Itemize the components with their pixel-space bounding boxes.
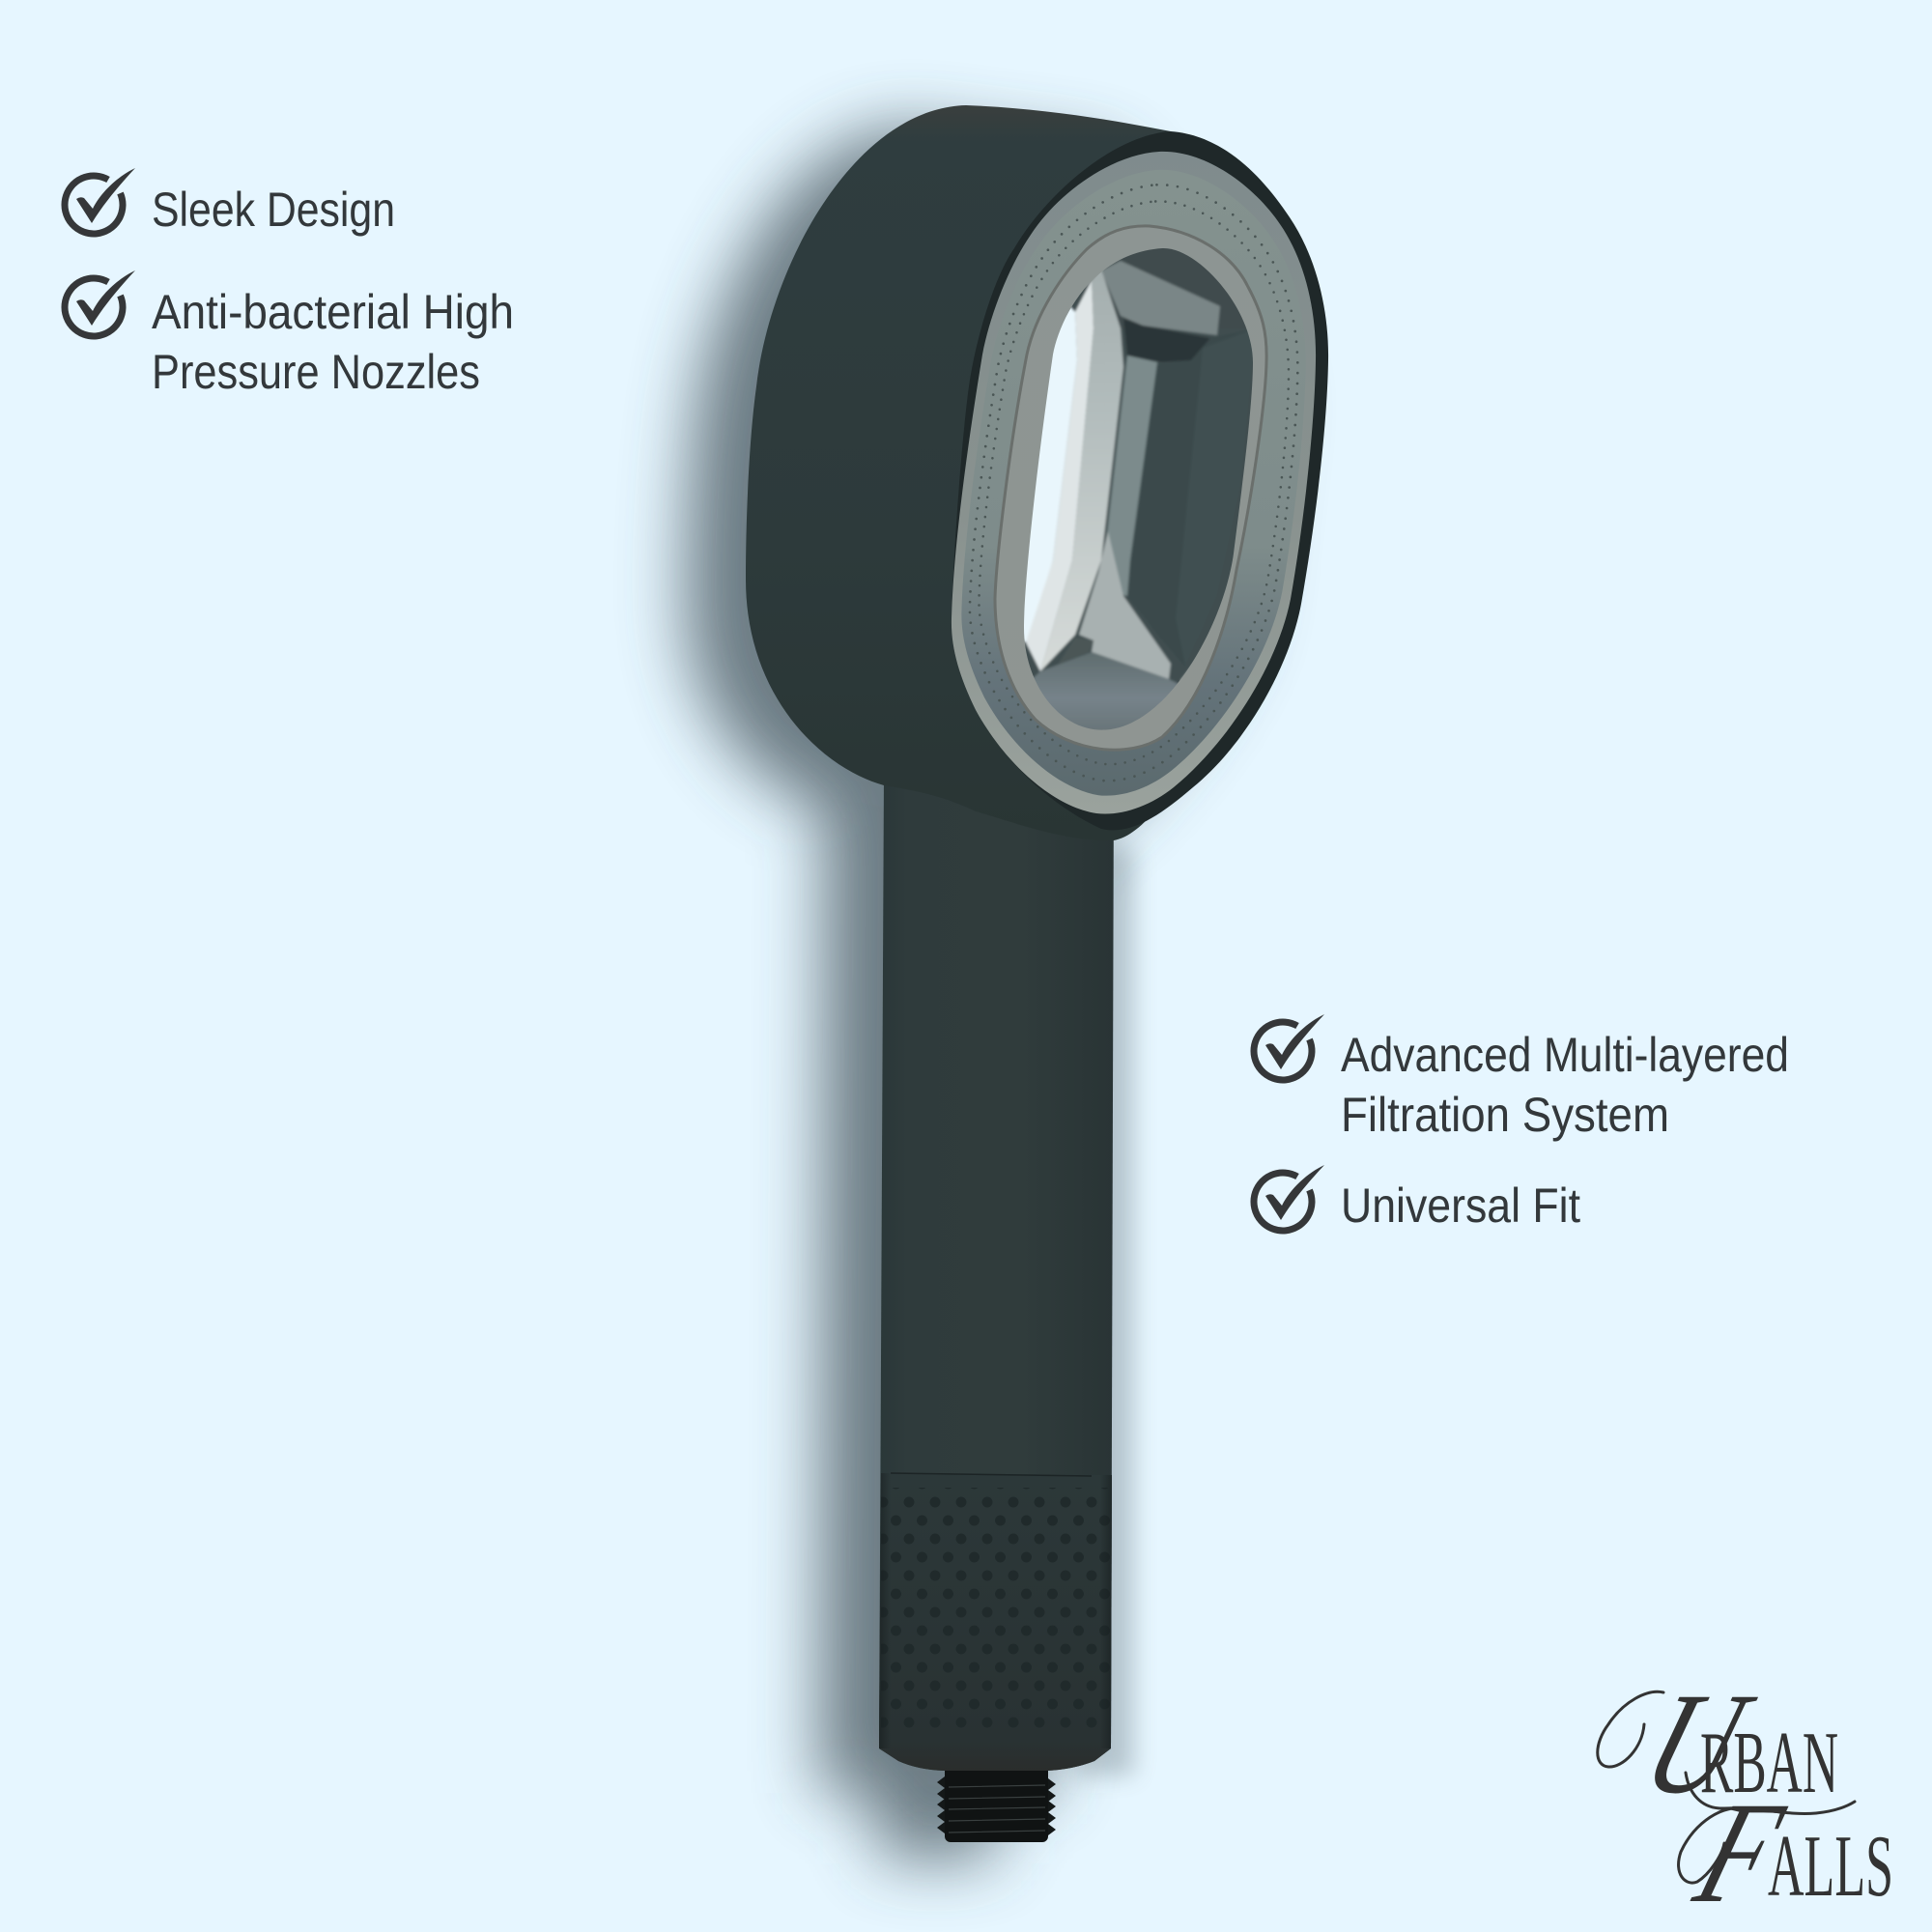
logo flourishes [1598, 1691, 1855, 1883]
see-through opening [1024, 305, 1078, 643]
top shadow band [1123, 319, 1210, 362]
nozzle dots [970, 185, 1297, 781]
dark notch [1061, 639, 1092, 662]
icon: check badge [65, 270, 135, 336]
feature list: right [1254, 1014, 1789, 1233]
threaded connector [937, 1764, 1056, 1842]
nozzle band [961, 170, 1306, 796]
floor of window [1034, 651, 1179, 730]
text: anti-bacterial high pressure nozzles [152, 285, 514, 399]
head body [746, 105, 1256, 840]
handle [879, 773, 1114, 1771]
text: sleek design: Sleek Design [152, 183, 395, 237]
translucent nozzle ring [952, 152, 1316, 814]
text: anti-bacterial high pressure nozzles: Anti-bacterial High [152, 285, 514, 339]
small glare [1179, 666, 1190, 681]
grey wall band [1040, 269, 1123, 671]
feature list: left [65, 168, 514, 399]
textured grip with dimples [879, 1473, 1112, 1771]
central dark panel [1127, 328, 1256, 667]
top glare [1101, 261, 1220, 335]
dark front rim [952, 131, 1328, 830]
shower head product [746, 105, 1328, 1842]
product drop shadow [686, 128, 1268, 1859]
logo word: falls [1680, 1772, 1893, 1932]
text: advanced multi-layered filtration system: Advanced Multi-layered [1341, 1028, 1789, 1082]
text: advanced multi-layered filtration system: Filtration System [1341, 1088, 1669, 1142]
transparent window [1024, 248, 1253, 730]
top dark cap [1101, 232, 1265, 328]
logo word: urban [1627, 1663, 1838, 1824]
pale strip [1101, 355, 1157, 596]
icon: check badge [1254, 1165, 1324, 1231]
lower reflection [1079, 531, 1171, 679]
inner lip [995, 226, 1266, 750]
logo word: urban: U [1627, 1663, 1769, 1824]
icon: check badge [1254, 1014, 1324, 1080]
white wall band [1026, 280, 1094, 671]
icon: check badge [65, 168, 135, 234]
text: advanced multi-layered filtration system [1341, 1028, 1789, 1142]
right lighter strip [1176, 328, 1256, 667]
text: universal fit: Universal Fit [1341, 1179, 1580, 1233]
logo: urban falls [1598, 1663, 1893, 1932]
logo word: falls: F [1680, 1772, 1800, 1932]
text: anti-bacterial high pressure nozzles: Pressure Nozzles [152, 345, 480, 399]
